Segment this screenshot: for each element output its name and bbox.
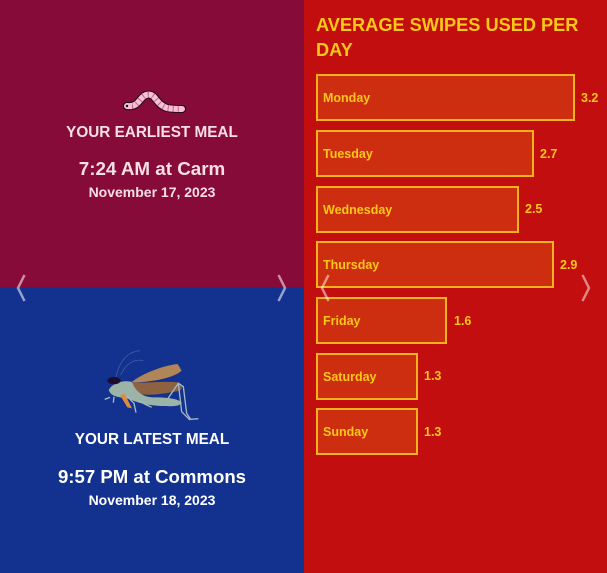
arrow: right panel previous xyxy=(320,274,330,302)
value: Sunday: 1.3 xyxy=(424,425,441,439)
value: Wednesday: 2.5 xyxy=(525,202,542,216)
bar: Thursday: Thursday xyxy=(323,258,379,272)
bar: Wednesday: Wednesday xyxy=(323,203,392,217)
bar: Friday xyxy=(316,297,447,344)
value: Thursday: 2.9 xyxy=(560,258,577,272)
text: earliest date: November 17, 2023 xyxy=(89,184,215,200)
icon: worm xyxy=(123,90,186,113)
arrow: right panel next xyxy=(582,274,590,302)
text: latest date: November 18, 2023 xyxy=(89,492,215,508)
bar: Wednesday xyxy=(316,186,519,233)
value: Monday: 3.2 xyxy=(581,91,598,105)
bar: Saturday: Saturday xyxy=(323,370,376,384)
bar: Tuesday xyxy=(316,130,534,177)
bar: Sunday xyxy=(316,408,418,455)
bar: Friday: Friday xyxy=(323,314,361,328)
panel: latest meal xyxy=(0,287,304,573)
text: latest time and place: 9:57 PM at Commons xyxy=(58,466,246,487)
panel: earliest meal xyxy=(0,0,304,287)
bar: Tuesday: Tuesday xyxy=(323,147,373,161)
value: Friday: 1.6 xyxy=(454,314,471,328)
bar: Thursday xyxy=(316,241,554,288)
bar: Sunday: Sunday xyxy=(323,425,368,439)
heading: your earliest meal: YOUR EARLIEST MEAL xyxy=(66,124,238,141)
value: Tuesday: 2.7 xyxy=(540,147,557,161)
panel: average swipes xyxy=(304,0,607,573)
heading: average swipes used per day: AVERAGE SWIPES USED PER DAY xyxy=(316,15,578,60)
value: Saturday: 1.3 xyxy=(424,369,441,383)
text: earliest time and place: 7:24 AM at Carm xyxy=(79,158,225,179)
bar: Monday xyxy=(316,74,575,121)
arrow: left panel previous xyxy=(16,274,26,302)
bar: Saturday xyxy=(316,353,418,400)
arrow: left panel next xyxy=(278,274,286,302)
heading: your latest meal: YOUR LATEST MEAL xyxy=(75,431,229,448)
bar: Monday: Monday xyxy=(323,91,370,105)
icon: grasshopper xyxy=(104,350,198,420)
